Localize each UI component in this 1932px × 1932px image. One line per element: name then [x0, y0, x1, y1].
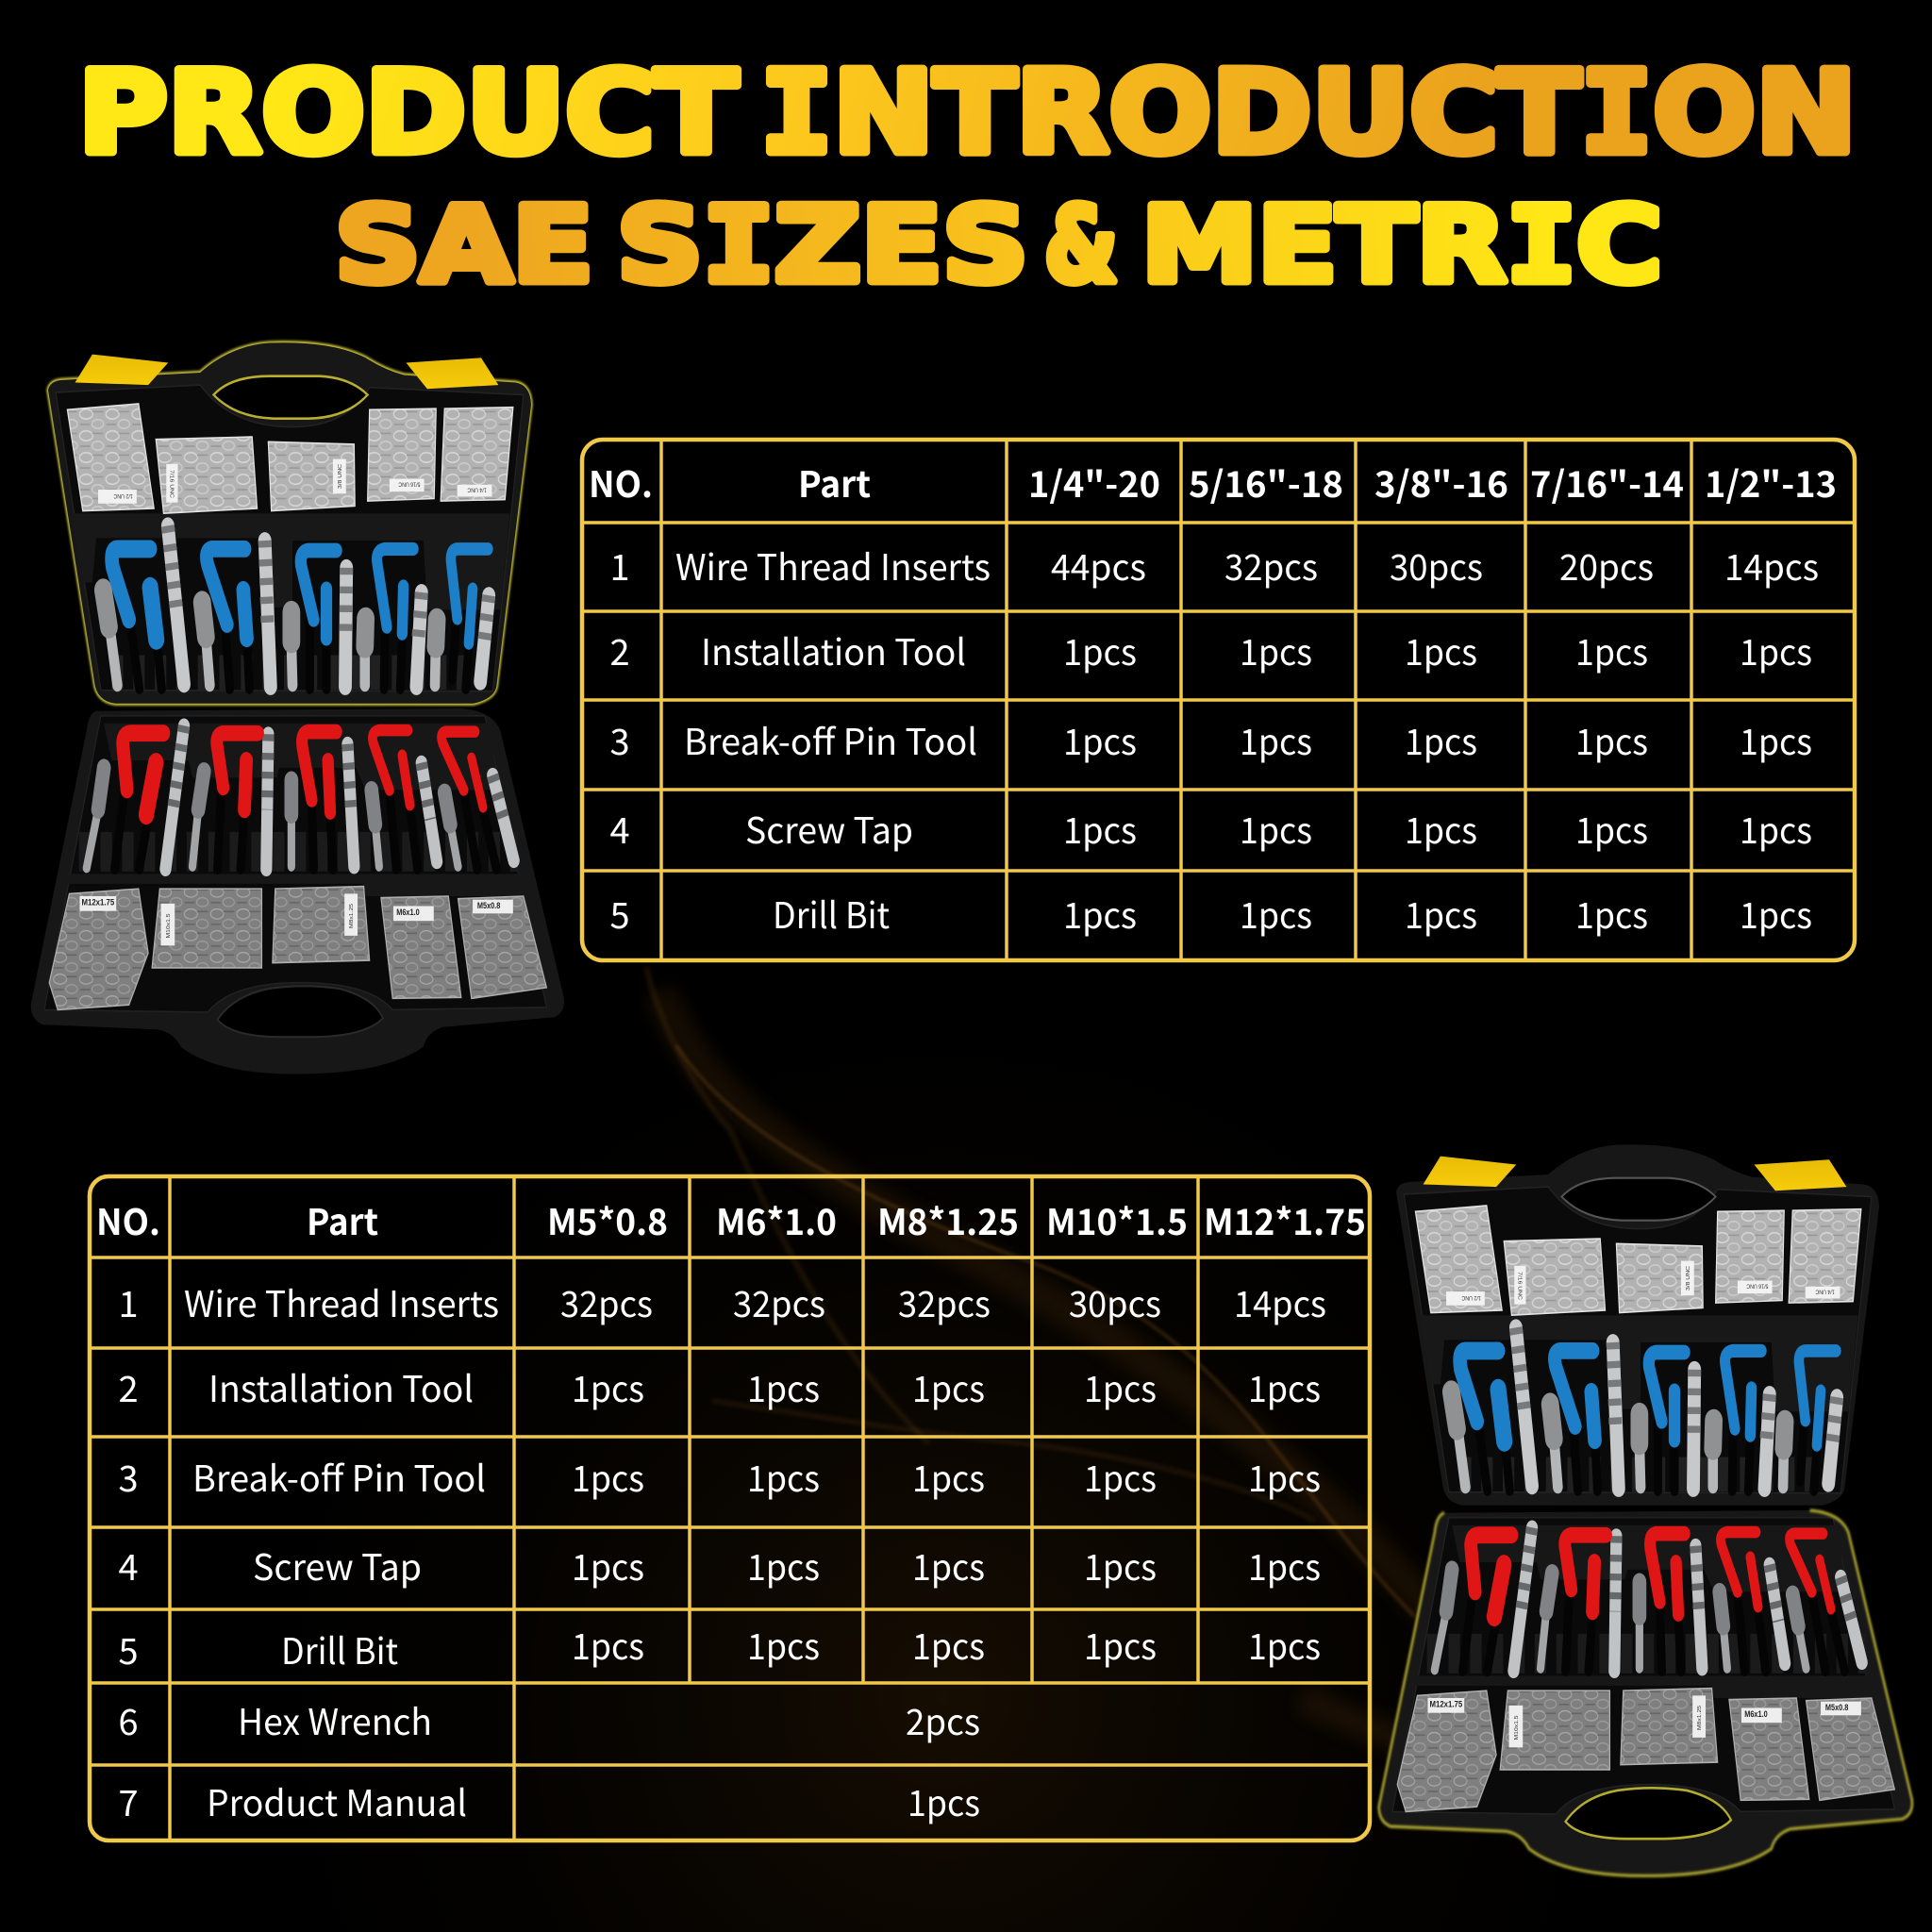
row 4 SAE: 1pcs [1240, 802, 1312, 854]
row 7 metric: 1pcs [908, 1774, 980, 1826]
row 3 metric: 1pcs [912, 1450, 985, 1502]
row 2 SAE [609, 624, 1812, 675]
row 1 metric: Wire Thread Inserts [184, 1275, 499, 1327]
table grid metric [90, 1176, 1370, 1840]
row 5 SAE: 1pcs [1063, 887, 1137, 939]
heading line 1 [78, 48, 1857, 179]
row 2 metric: 1pcs [1248, 1360, 1321, 1412]
row 3 SAE: 1pcs [1405, 713, 1477, 765]
box labels SAE: 5/16 UNC [398, 481, 421, 488]
lower case handle opening [218, 986, 383, 1037]
foam slots upper [111, 640, 485, 706]
header row metric: M6*1.0 [716, 1193, 837, 1245]
row 4 metric [118, 1539, 1321, 1591]
row 3 SAE: Break-off Pin Tool [684, 713, 977, 765]
header row metric: NO. [96, 1193, 160, 1245]
header row metric: M5*0.8 [547, 1193, 668, 1245]
table: SAE sizes [582, 440, 1855, 960]
row 4 metric: 1pcs [1248, 1539, 1321, 1591]
row 6 metric: 2pcs [906, 1693, 980, 1745]
box labels metric: M12x1.75 [81, 898, 115, 908]
row 4 metric: 1pcs [912, 1539, 985, 1591]
row 1 metric: 14pcs [1234, 1275, 1326, 1327]
row 5 metric: 1pcs [747, 1618, 820, 1670]
row 1 SAE: 1 [609, 539, 630, 591]
box labels SAE: 7/16 UNC [169, 470, 175, 499]
row 2 SAE: 1pcs [1740, 624, 1812, 675]
row 3 SAE: 1pcs [1740, 713, 1812, 765]
header row metric: M8*1.25 [877, 1193, 1019, 1245]
row 2 SAE: Installation Tool [701, 624, 966, 675]
row 4 metric: 4 [118, 1539, 139, 1591]
row 7 metric: 7 [118, 1774, 139, 1826]
glow: second case lower handle opening [1566, 1788, 1731, 1839]
upper lid handle opening [213, 376, 368, 419]
foam tray upper [71, 513, 510, 609]
row 3 SAE: 1pcs [1240, 713, 1312, 765]
box labels SAE: 1/2 UNC [113, 492, 133, 499]
header row SAE: 5/16"-18 [1189, 456, 1343, 508]
box labels SAE: 3/8 UNC [338, 463, 343, 489]
row 4 metric: Screw Tap [253, 1539, 422, 1591]
row 5 SAE: 1pcs [1575, 887, 1648, 939]
header row metric [96, 1193, 1366, 1245]
row 1 SAE: 32pcs [1224, 539, 1318, 591]
row 6 metric: Hex Wrench [238, 1693, 432, 1745]
header row SAE: 1/2"-13 [1705, 456, 1837, 508]
header row metric: Part [307, 1193, 378, 1245]
row 2 metric: Installation Tool [208, 1360, 474, 1412]
row 1 metric: 32pcs [560, 1275, 653, 1327]
row 4 SAE [609, 802, 1812, 854]
red installation tools [87, 725, 514, 869]
second product case photo [1379, 1144, 1912, 1875]
box labels metric: M5x0.8 [477, 901, 501, 910]
box labels SAE: 1/4 UNC [467, 486, 487, 493]
row 5 metric [118, 1618, 1321, 1674]
row 1 metric [118, 1275, 1326, 1327]
row 1 SAE: 30pcs [1390, 539, 1483, 591]
box labels metric: M8x1.25 [349, 903, 355, 928]
box labels metric [79, 893, 513, 945]
foam tray lower [104, 724, 498, 790]
row 7 metric [118, 1774, 980, 1826]
row 1 SAE: 20pcs [1559, 539, 1654, 591]
row 5 metric: Drill Bit [281, 1623, 398, 1674]
row 3 metric: 1pcs [1084, 1450, 1157, 1502]
heading line 2: SIZES [617, 185, 1028, 307]
row 4 SAE: 1pcs [1405, 802, 1477, 854]
row 2 metric: 1pcs [747, 1360, 820, 1412]
row 2 SAE: 2 [609, 624, 630, 675]
row 1 SAE: 14pcs [1724, 539, 1819, 591]
row 3 metric [118, 1450, 1321, 1502]
row 4 metric: 1pcs [572, 1539, 644, 1591]
blue installation tools [103, 525, 489, 689]
heading line 1: PRODUCT [78, 48, 738, 179]
lower case recess [44, 716, 546, 1012]
row 4 SAE: 1pcs [1063, 802, 1137, 854]
box labels metric: M10x1.5 [166, 913, 172, 938]
row 2 metric: 1pcs [912, 1360, 985, 1412]
heading line 2: SAE [335, 185, 593, 307]
header row SAE: 1/4"-20 [1028, 456, 1160, 508]
foam band lower [65, 874, 533, 896]
row 4 SAE: 1pcs [1740, 802, 1812, 854]
row 1 metric: 30pcs [1069, 1275, 1161, 1327]
upper lid shell [48, 342, 531, 704]
row 4 SAE: 4 [609, 802, 630, 854]
lower case shell [31, 708, 564, 1074]
row 1 metric: 32pcs [898, 1275, 991, 1327]
box labels SAE [98, 459, 491, 504]
row 5 SAE: 1pcs [1405, 887, 1477, 939]
row 5 SAE: Drill Bit [773, 887, 890, 939]
heading line 2: METR IC [1141, 185, 1662, 307]
row 2 metric [118, 1360, 1321, 1412]
upper lid recess [56, 385, 524, 691]
title [78, 48, 1857, 307]
row 1 metric: 32pcs [733, 1275, 825, 1327]
row 1 SAE [609, 539, 1819, 591]
header row metric: M12*1.75 [1204, 1193, 1366, 1245]
row 5 metric: 1pcs [1248, 1618, 1321, 1670]
row 3 SAE: 3 [609, 713, 630, 765]
row 5 SAE [609, 887, 1812, 939]
row 3 SAE: 1pcs [1575, 713, 1648, 765]
heading line 1: INTRODUCT ION [760, 48, 1857, 179]
row 4 SAE: 1pcs [1575, 802, 1648, 854]
header row metric: M10*1.5 [1046, 1193, 1188, 1245]
row 3 metric: Break-off Pin Tool [192, 1450, 486, 1502]
row 4 metric: 1pcs [1084, 1539, 1157, 1591]
row 2 metric: 1pcs [1084, 1360, 1157, 1412]
row 4 metric: 1pcs [747, 1539, 820, 1591]
row 3 metric: 1pcs [1248, 1450, 1321, 1502]
table: metric sizes [90, 1176, 1370, 1840]
row 2 metric: 1pcs [572, 1360, 644, 1412]
header row SAE: 7/16"-14 [1530, 456, 1684, 508]
row 5 metric: 1pcs [1084, 1618, 1157, 1670]
box labels metric: M6x1.0 [396, 908, 420, 917]
row 1 SAE: 44pcs [1051, 539, 1146, 591]
foam slots lower [79, 814, 518, 890]
row 2 SAE: 1pcs [1405, 624, 1477, 675]
row 6 metric [118, 1693, 980, 1745]
row 5 SAE: 1pcs [1740, 887, 1812, 939]
yellow latch left [75, 355, 168, 385]
heading line 2: & [1044, 185, 1118, 307]
table grid SAE [582, 440, 1855, 960]
insert boxes metric [49, 887, 546, 1009]
product case photo: SAE and metric kit [31, 342, 564, 1074]
header row SAE: Part [798, 456, 871, 508]
yellow latch right [406, 358, 498, 389]
row 5 metric: 5 [118, 1623, 139, 1674]
row 2 SAE: 1pcs [1240, 624, 1312, 675]
insert boxes SAE [67, 404, 513, 513]
header row SAE [589, 456, 1837, 508]
row 1 metric: 1 [118, 1275, 139, 1327]
row 7 metric: Product Manual [207, 1774, 467, 1826]
row 5 metric: 1pcs [572, 1618, 644, 1670]
row 3 metric: 1pcs [747, 1450, 820, 1502]
row 3 metric: 3 [118, 1450, 139, 1502]
heading line 2 [335, 185, 1662, 307]
row 5 SAE: 1pcs [1240, 887, 1312, 939]
row 5 SAE: 5 [609, 887, 630, 939]
row 2 metric: 2 [118, 1360, 139, 1412]
row 1 SAE: Wire Thread Inserts [675, 539, 991, 591]
header row SAE: 3/8"-16 [1374, 456, 1508, 508]
row 5 metric: 1pcs [912, 1618, 985, 1670]
glow: first case handle opening [213, 376, 368, 419]
row 4 SAE: Screw Tap [745, 802, 913, 854]
glow: upper lid of first case [48, 342, 531, 704]
header row SAE: NO. [589, 456, 653, 508]
row 3 SAE: 1pcs [1063, 713, 1137, 765]
row 6 metric: 6 [118, 1693, 139, 1745]
row 2 SAE: 1pcs [1575, 624, 1648, 675]
row 3 SAE [609, 713, 1812, 765]
glow: lower half of second case [1379, 1510, 1912, 1875]
row 3 metric: 1pcs [572, 1450, 644, 1502]
row 2 SAE: 1pcs [1063, 624, 1137, 675]
